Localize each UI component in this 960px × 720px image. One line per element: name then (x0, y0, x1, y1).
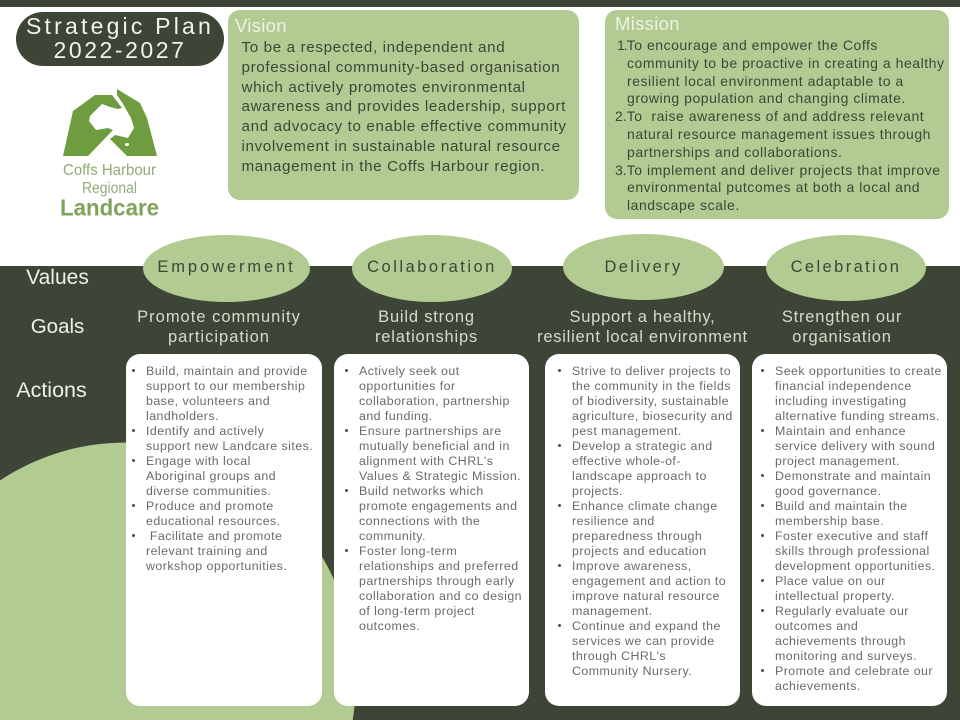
action item: Facilitate and promote (150, 529, 282, 543)
action item: Enhance climate change (572, 499, 718, 513)
action item: development opportunities. (775, 559, 936, 573)
action item: financial independence (775, 379, 912, 393)
action item: support new Landcare sites. (146, 439, 313, 453)
mission item 2 continuation (627, 126, 931, 160)
action item: diverse communities. (146, 484, 271, 498)
action item: membership base. (775, 514, 884, 528)
action item (572, 364, 733, 439)
action item: Foster executive and staff (775, 529, 928, 543)
action item (146, 424, 313, 454)
text: vision statement: and advocacy to enable effective community (242, 118, 567, 135)
mission item 1 continuation: resilient local environment adaptable to a (627, 73, 904, 89)
action item (359, 544, 522, 634)
action item: good governance. (775, 484, 881, 498)
text: vision statement: awareness and provides leadership, support (242, 98, 566, 115)
action item: promote engagements and (359, 499, 517, 513)
action item: base, volunteers and (146, 394, 270, 408)
panel: celebration actions (752, 354, 947, 706)
action item: Build, maintain and provide (146, 364, 308, 378)
action item: connections with the (359, 514, 480, 528)
action item: achievements through (775, 634, 906, 648)
action item: projects and education (572, 544, 707, 558)
goal: celebration (782, 308, 902, 346)
action item (775, 424, 942, 469)
action item (775, 499, 942, 529)
goal: empowerment (137, 308, 301, 346)
action item: Develop a strategic and (572, 439, 713, 453)
action item (146, 454, 313, 499)
action item: Foster long-term (359, 544, 457, 558)
action item (146, 499, 313, 529)
action item: Promote and celebrate our (775, 664, 933, 678)
action item (775, 529, 942, 574)
action item: Identify and actively (146, 424, 264, 438)
row label: values: Values (26, 266, 89, 289)
action item: intellectual property. (775, 589, 895, 603)
goal: empowerment: Promote community (137, 308, 301, 326)
action item (775, 604, 942, 664)
heading: mission: Mission (615, 13, 680, 34)
action item: Engage with local (146, 454, 251, 468)
action item: Ensure partnerships are (359, 424, 502, 438)
action item: Build and maintain the (775, 499, 908, 513)
action item (359, 484, 522, 544)
action item: collaboration, partnership (359, 394, 510, 408)
action list: collaboration (345, 364, 522, 633)
goal: empowerment: participation (168, 328, 270, 346)
action item (572, 559, 733, 619)
title pill: 2022-2027 (54, 37, 186, 63)
action item: collaboration and co design (359, 589, 522, 603)
action item: Values & Strategic Mission. (359, 469, 521, 483)
mission item 1 continuation: growing population and changing climate. (627, 90, 906, 106)
value: celebration (766, 235, 926, 301)
goal: celebration: Strengthen our (782, 308, 902, 326)
mission item 2: 2.To raise awareness of and address relevant (615, 108, 924, 124)
text: vision statement (242, 39, 567, 174)
action list: delivery (558, 364, 733, 678)
action item: and funding. (359, 409, 433, 423)
icon: right hand (110, 89, 157, 156)
goal: celebration: organisation (792, 328, 892, 346)
action item: relationships and preferred (359, 559, 519, 573)
action item: landscape approach to (572, 469, 707, 483)
action item (359, 364, 522, 424)
dark lower background with light green curve (0, 266, 960, 720)
action item: educational resources. (146, 514, 281, 528)
action item: Community Nursery. (572, 664, 692, 678)
goal: delivery: Support a healthy, (569, 308, 716, 326)
action item: Maintain and enhance (775, 424, 906, 438)
value: collaboration (352, 235, 512, 302)
action item: of long-term project (359, 604, 475, 618)
action item: Build networks which (359, 484, 484, 498)
action item (572, 619, 733, 679)
text: vision statement: involvement in sustainable natural resource (242, 138, 561, 155)
action item: achievements. (775, 679, 861, 693)
action list: empowerment (132, 364, 313, 573)
mission item 3 continuation: landscape scale. (627, 197, 740, 213)
action item: preparedness through (572, 529, 702, 543)
action item (359, 424, 522, 484)
action item: including investigating (775, 394, 907, 408)
goal: delivery: resilient local environment (537, 328, 748, 346)
value: delivery (563, 234, 724, 300)
icon: left hand (63, 95, 122, 156)
action item: outcomes. (359, 619, 420, 633)
action item: Strive to deliver projects to (572, 364, 731, 378)
action item: Actively seek out (359, 364, 460, 378)
text: vision statement: professional community-based organisation (242, 59, 560, 76)
action item: effective whole-of- (572, 454, 681, 468)
panel: collaboration actions (334, 354, 529, 706)
value: empowerment: Empowerment (157, 258, 296, 276)
row label: actions: Actions (16, 378, 87, 402)
action item: Produce and promote (146, 499, 274, 513)
icon: Tasmania (125, 143, 129, 146)
logo text: Landcare: Landcare (60, 194, 159, 220)
action item (146, 364, 313, 424)
logo text: Coffs Harbour: Coffs Harbour (63, 162, 156, 179)
top dark strip (0, 0, 960, 7)
action item: improve natural resource (572, 589, 720, 603)
text: vision statement: To be a respected, independent and (242, 39, 505, 56)
action item: skills through professional (775, 544, 930, 558)
text: mission list (615, 37, 945, 213)
action item: resilience and (572, 514, 655, 528)
logo text: Regional: Regional (82, 180, 137, 197)
action item: outcomes and (775, 619, 858, 633)
mission item 2 continuation: partnerships and collaborations. (627, 144, 842, 160)
title pill: Strategic Plan (26, 13, 214, 39)
mission item 1: 1.To encourage and empower the Coffs (617, 37, 878, 53)
panel: vision (228, 10, 579, 200)
action item: opportunities for (359, 379, 456, 393)
action item (775, 664, 942, 694)
mission item 3: 3.To implement and deliver projects that improve (615, 162, 941, 178)
action item: management. (572, 604, 653, 618)
action item (572, 499, 733, 559)
text: vision statement: management in the Coffs Harbour region. (242, 158, 545, 174)
action item: Place value on our (775, 574, 886, 588)
value: delivery: Delivery (604, 258, 682, 276)
action item: agriculture, biosecurity and (572, 409, 733, 423)
action item: pest management. (572, 424, 682, 438)
action item: Improve awareness, (572, 559, 692, 573)
title pill (16, 12, 224, 66)
action item: partnerships through early (359, 574, 515, 588)
mission item 1 continuation: community to be proactive in creating a healthy (627, 55, 945, 71)
action item: alternative funding streams. (775, 409, 940, 423)
action item: engagement and action to (572, 574, 726, 588)
action item (775, 469, 942, 499)
value: collaboration: Collaboration (367, 258, 497, 276)
action item: landholders. (146, 409, 219, 423)
action item: monitoring and surveys. (775, 649, 917, 663)
action item: service delivery with sound (775, 439, 935, 453)
panel: delivery actions (545, 354, 740, 706)
action item: Aboriginal groups and (146, 469, 276, 483)
action item: projects. (572, 484, 623, 498)
value: empowerment (143, 235, 310, 302)
row label: goals: Goals (31, 315, 84, 338)
action item: relevant training and (146, 544, 268, 558)
panel: mission (605, 10, 949, 219)
action item: Seek opportunities to create (775, 364, 942, 378)
goal: collaboration (375, 308, 478, 346)
goal: collaboration: relationships (375, 328, 478, 346)
logo: Coffs Harbour Regional Landcare (60, 89, 159, 220)
panel: empowerment actions (126, 354, 322, 706)
action item (775, 574, 942, 604)
action item: Continue and expand the (572, 619, 721, 633)
goal: delivery (537, 308, 748, 346)
action list: celebration (761, 364, 942, 693)
action item (146, 529, 313, 574)
action item: community. (359, 529, 426, 543)
value: celebration: Celebration (791, 258, 901, 276)
action item: workshop opportunities. (146, 559, 287, 573)
action item: Regularly evaluate our (775, 604, 909, 618)
mission item 1 continuation (627, 55, 945, 106)
action item: services we can provide (572, 634, 715, 648)
goal: collaboration: Build strong (378, 308, 475, 326)
action item (775, 364, 942, 424)
action item: of biodiversity, sustainable (572, 394, 729, 408)
action item: project management. (775, 454, 900, 468)
action item: Demonstrate and maintain (775, 469, 931, 483)
action item: support to our membership (146, 379, 305, 393)
action item: mutually beneficial and in (359, 439, 510, 453)
action item: alignment with CHRL's (359, 454, 493, 468)
mission item 3 continuation: environmental putcomes at both a local and (627, 179, 920, 195)
action item: through CHRL's (572, 649, 666, 663)
mission item 3 continuation (627, 179, 920, 213)
action item: the community in the fields (572, 379, 731, 393)
mission item 2 continuation: natural resource management issues through (627, 126, 931, 142)
heading: vision: Vision (235, 15, 287, 36)
action item (572, 439, 733, 499)
text: vision statement: which actively promotes environmental (242, 78, 526, 96)
